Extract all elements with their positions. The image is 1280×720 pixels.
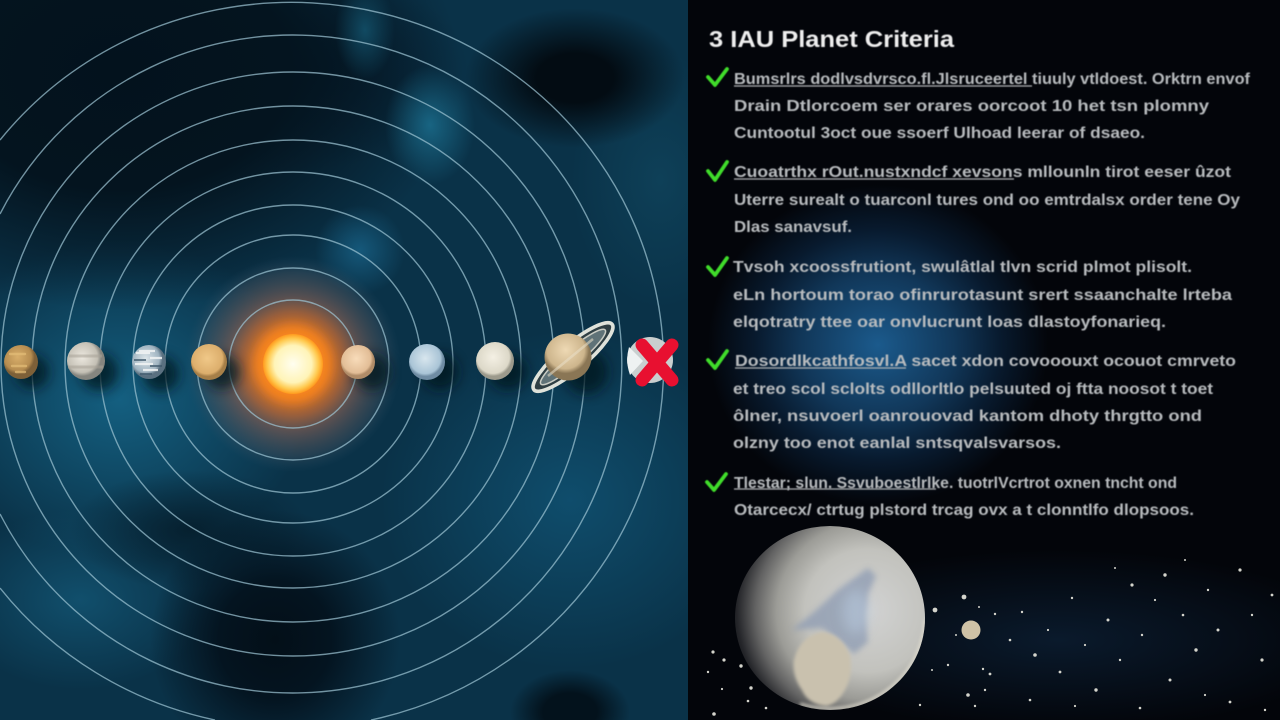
- icon: check mark 4: [708, 351, 727, 368]
- icon: check mark 2: [708, 162, 727, 180]
- criterion 1 text: Drain Dtlorcoem ser orares oorcoot 10 het tsn plomny: [734, 98, 1209, 115]
- panel: solar system diagram: [0, 2, 673, 720]
- criterion 1 text: Bumsrlrs dodlvsdvrsco.fl.Jlsruceertel tiuuly vtldoest. Orktrn envof: [734, 71, 1251, 88]
- orbit rings: [0, 2, 664, 720]
- criterion 2 text: Dlas sanavsuf.: [734, 219, 852, 236]
- illustration: small moon: [962, 620, 980, 640]
- red cross: [642, 345, 672, 380]
- criterion 2 text: Cuoatrthx rOut.nustxndcf xevsons mllounln tirot eeser ûzot: [734, 164, 1232, 181]
- criterion 2: [708, 162, 1240, 236]
- sun: [255, 326, 331, 402]
- planet 2: [67, 342, 105, 380]
- planet shadows: [15, 350, 608, 394]
- planet: ringed saturn: [526, 314, 620, 400]
- starfield: [707, 559, 1273, 716]
- criterion 4 text: [733, 353, 1236, 452]
- heading: 3 IAU Planet Criteria: [709, 26, 955, 52]
- criterion 3 text: Tvsoh xcoossfrutiont, swulâtlal tlvn scrid plmot plisolt.: [733, 259, 1192, 276]
- criterion 3 text: eLn hortoum torao ofinrurotasunt srert ssaanchalte lrteba: [733, 287, 1232, 304]
- sun glow: [185, 256, 401, 472]
- icon: check mark 3: [708, 258, 727, 275]
- background: nebula behind solar system: [0, 0, 688, 720]
- criterion 3: [708, 258, 1232, 331]
- planet 5: [341, 345, 375, 379]
- planet 1: [4, 345, 38, 379]
- criterion 4 text: ôlner, nsuvoerl oanrouovad kantom dhoty thrgtto ond: [733, 408, 1202, 425]
- criterion 4 text: Dosordlkcathfosvl.A sacet xdon covooouxt ocouot cmrveto: [735, 353, 1236, 370]
- panel: criteria: [707, 26, 1273, 716]
- criterion 4 text: et treo scol sclolts odllorltlo pelsuuted oj ftta noosot t toet: [733, 381, 1214, 398]
- planet 6: [409, 344, 445, 380]
- criterion 1: [708, 69, 1251, 142]
- criterion 5: [707, 474, 1194, 519]
- planet 4: [191, 344, 227, 380]
- icon: check mark 5: [707, 474, 726, 490]
- icon: check mark 1: [708, 69, 727, 85]
- criterion 3 text: elqotratry ttee oar onvlucrunt loas dlastoyfonarieq.: [733, 314, 1166, 331]
- background: dark starfield with blue glow: [688, 0, 1280, 720]
- criterion 1 text: [734, 71, 1251, 142]
- criterion 3 text: [733, 259, 1232, 331]
- planet 3: [132, 345, 166, 379]
- criterion 5 text: [734, 475, 1194, 519]
- criterion 4: [708, 351, 1236, 452]
- criterion 5 text: Otarcecx/ ctrtug plstord trcag ovx a t clonntlfo dlopsoos.: [734, 502, 1194, 519]
- illustration: dwarf planet pluto: [735, 526, 925, 710]
- criterion 5 text: Tlestar; slun. Ssvuboestlrlke. tuotrlVcrtrot oxnen tncht ond: [734, 475, 1177, 492]
- criterion 2 text: Uterre surealt o tuarconl tures ond oo emtrdalsx order tene Oy: [734, 192, 1240, 209]
- criterion 1 text: Cuntootul 3oct oue ssoerf Ulhoad leerar of dsaeo.: [734, 125, 1145, 142]
- criterion 2 text: [734, 164, 1240, 236]
- planet: pluto crossed out: [627, 337, 673, 383]
- planet 7: [476, 342, 514, 380]
- criterion 4 text: olzny too enot eanlal sntsqvalsvarsos.: [733, 435, 1061, 452]
